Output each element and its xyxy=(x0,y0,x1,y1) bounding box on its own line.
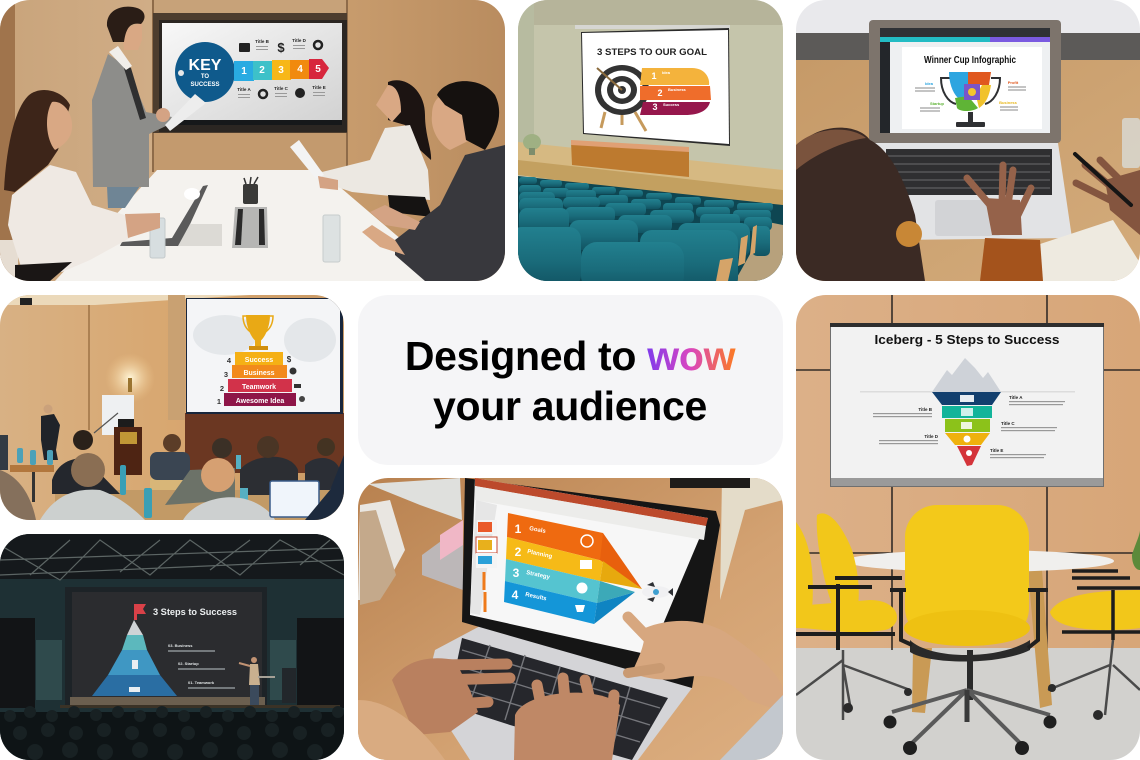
stair steps: Teamwork xyxy=(242,384,276,391)
audience from behind xyxy=(0,430,344,520)
right back chair xyxy=(1048,571,1140,720)
iceberg labels: Title A xyxy=(1009,395,1023,400)
waterline xyxy=(860,391,1075,392)
step titles and icons: Title B xyxy=(255,39,270,44)
step titles and icons: $ xyxy=(277,40,285,55)
step titles and icons: Title E xyxy=(312,85,326,90)
cup labels: Idea xyxy=(925,81,934,86)
stair steps: 3 xyxy=(224,370,228,379)
goal steps: Business xyxy=(668,87,687,92)
water glass xyxy=(1122,118,1140,168)
headline second line: your audience xyxy=(433,383,707,429)
side speakers xyxy=(0,618,344,708)
presenter on stage xyxy=(239,657,296,705)
stair steps: 1 xyxy=(217,397,221,406)
layered mountain xyxy=(92,620,177,696)
stair steps: Awesome Idea xyxy=(236,398,284,405)
person: seated man right xyxy=(362,81,505,281)
cup labels: Profit xyxy=(1008,80,1019,85)
goal steps: Success xyxy=(663,102,680,107)
slide band labels xyxy=(512,522,593,612)
stage slide labels xyxy=(168,643,235,689)
lectern desk xyxy=(523,134,689,177)
slide thumbnails xyxy=(476,520,497,612)
goal steps: 2 xyxy=(657,88,663,98)
numbered key steps: 1 xyxy=(241,66,247,77)
iceberg labels: Title C xyxy=(1001,421,1015,426)
stair steps: 4 xyxy=(227,356,232,365)
person: seated woman left xyxy=(4,90,160,281)
stage floor edge xyxy=(60,705,340,708)
stair steps: Success xyxy=(245,357,273,364)
step titles and icons: Title D xyxy=(292,38,307,43)
person: hair from behind xyxy=(796,128,925,281)
goal steps: 3 xyxy=(652,102,658,112)
numbered key steps xyxy=(234,59,329,81)
key circle: KEY xyxy=(189,57,222,74)
panel: large stage with 3 Steps to Success screen xyxy=(0,534,344,760)
stair steps: $ xyxy=(287,355,292,364)
panel: laptop with PowerPoint slide and hands xyxy=(358,478,783,760)
open notebook xyxy=(1031,220,1140,281)
stage slide title: 3 Steps to Success xyxy=(153,607,237,617)
headline: Designed to wow xyxy=(405,333,736,379)
slide band labels: 4 xyxy=(512,588,519,602)
laptop lid and slide xyxy=(462,478,720,688)
numbered key steps: 5 xyxy=(315,64,321,75)
rocket xyxy=(642,582,673,602)
left back chair xyxy=(796,513,912,720)
numbered key steps: 2 xyxy=(259,65,265,76)
laptop keyboard deck xyxy=(873,143,1072,240)
key circle: SUCCESS xyxy=(190,82,220,88)
slide band labels: Results xyxy=(525,592,548,603)
flag xyxy=(134,604,146,620)
stair steps: 2 xyxy=(220,384,224,393)
stage slide labels: 02. Startup xyxy=(178,661,199,666)
screen title: 3 STEPS TO OUR GOAL xyxy=(597,47,707,58)
projection screen: stair slide xyxy=(186,298,343,414)
slide funnel bands xyxy=(504,513,642,624)
cup title: Winner Cup Infographic xyxy=(924,55,1016,66)
goal steps: 1 xyxy=(651,71,657,81)
hands and pen xyxy=(967,154,1140,281)
plant xyxy=(1132,530,1140,570)
panel: laptop on desk with Winner Cup Infographic xyxy=(796,0,1140,281)
speaker and podium xyxy=(41,395,142,475)
stair steps: Business xyxy=(243,370,275,377)
trophy xyxy=(243,315,273,350)
slide band labels: Strategy xyxy=(526,570,551,581)
cup labels xyxy=(915,80,1026,111)
cup labels: Business xyxy=(999,100,1018,105)
front yellow chair xyxy=(884,505,1056,755)
slide band labels: Goals xyxy=(529,526,547,535)
iceberg labels: Title E xyxy=(990,448,1003,453)
puzzle trophy xyxy=(941,72,1000,127)
panel: auditorium photo with 3 Steps to Our Goal screen xyxy=(510,0,783,292)
key circle: TO xyxy=(201,74,209,80)
panel: meeting room photo with Key to Success screen xyxy=(0,0,505,281)
hand pointing at screen xyxy=(628,617,783,712)
person: seated woman right xyxy=(290,80,432,217)
sleeve at right xyxy=(720,695,783,760)
typing hands xyxy=(358,658,620,760)
numbered key steps: 4 xyxy=(297,64,303,75)
goal steps: Idea xyxy=(662,70,671,75)
laptop screen: Winner Cup xyxy=(869,20,1061,143)
step titles and icons: Title C xyxy=(274,86,289,91)
step titles and icons xyxy=(237,38,326,98)
screen: Key to Success xyxy=(153,13,347,133)
side table with bottles xyxy=(0,435,54,502)
panel: office with iceberg screen and yellow chairs xyxy=(796,295,1140,760)
person: standing presenter with papers xyxy=(92,7,206,208)
desk papers and power strip xyxy=(358,478,783,605)
slide band labels: Planning xyxy=(527,549,553,560)
slide band labels: 2 xyxy=(515,545,522,559)
slide band labels: 1 xyxy=(515,522,522,536)
iceberg title: Iceberg - 5 Steps to Success xyxy=(874,332,1060,347)
projection screen xyxy=(581,28,730,146)
slide band labels: 3 xyxy=(513,566,520,580)
teal seat rows xyxy=(518,176,783,281)
round table xyxy=(846,550,1114,713)
numbered key steps: 3 xyxy=(278,65,284,76)
stage slide labels: 03. Business xyxy=(168,643,193,648)
cup labels: Startup xyxy=(930,101,945,106)
key circle xyxy=(175,42,235,102)
goal steps xyxy=(640,68,711,115)
panel: headline card xyxy=(358,295,783,465)
table with items xyxy=(55,170,450,281)
panel: conference room photo with staircase slide xyxy=(0,295,344,520)
audience silhouettes xyxy=(0,706,344,760)
wall screen xyxy=(830,323,1104,487)
iceberg labels xyxy=(873,395,1065,458)
iceberg layers xyxy=(932,358,1001,466)
stage screen xyxy=(65,587,267,705)
iceberg labels: Title B xyxy=(918,407,933,412)
steel truss xyxy=(0,540,344,580)
target xyxy=(595,65,649,131)
laptop keyboard xyxy=(425,625,692,760)
stage slide labels: 01. Teamwork xyxy=(188,680,215,685)
step titles and icons: Title A xyxy=(237,87,251,92)
stair steps xyxy=(217,352,305,406)
iceberg labels: Title D xyxy=(924,434,939,439)
